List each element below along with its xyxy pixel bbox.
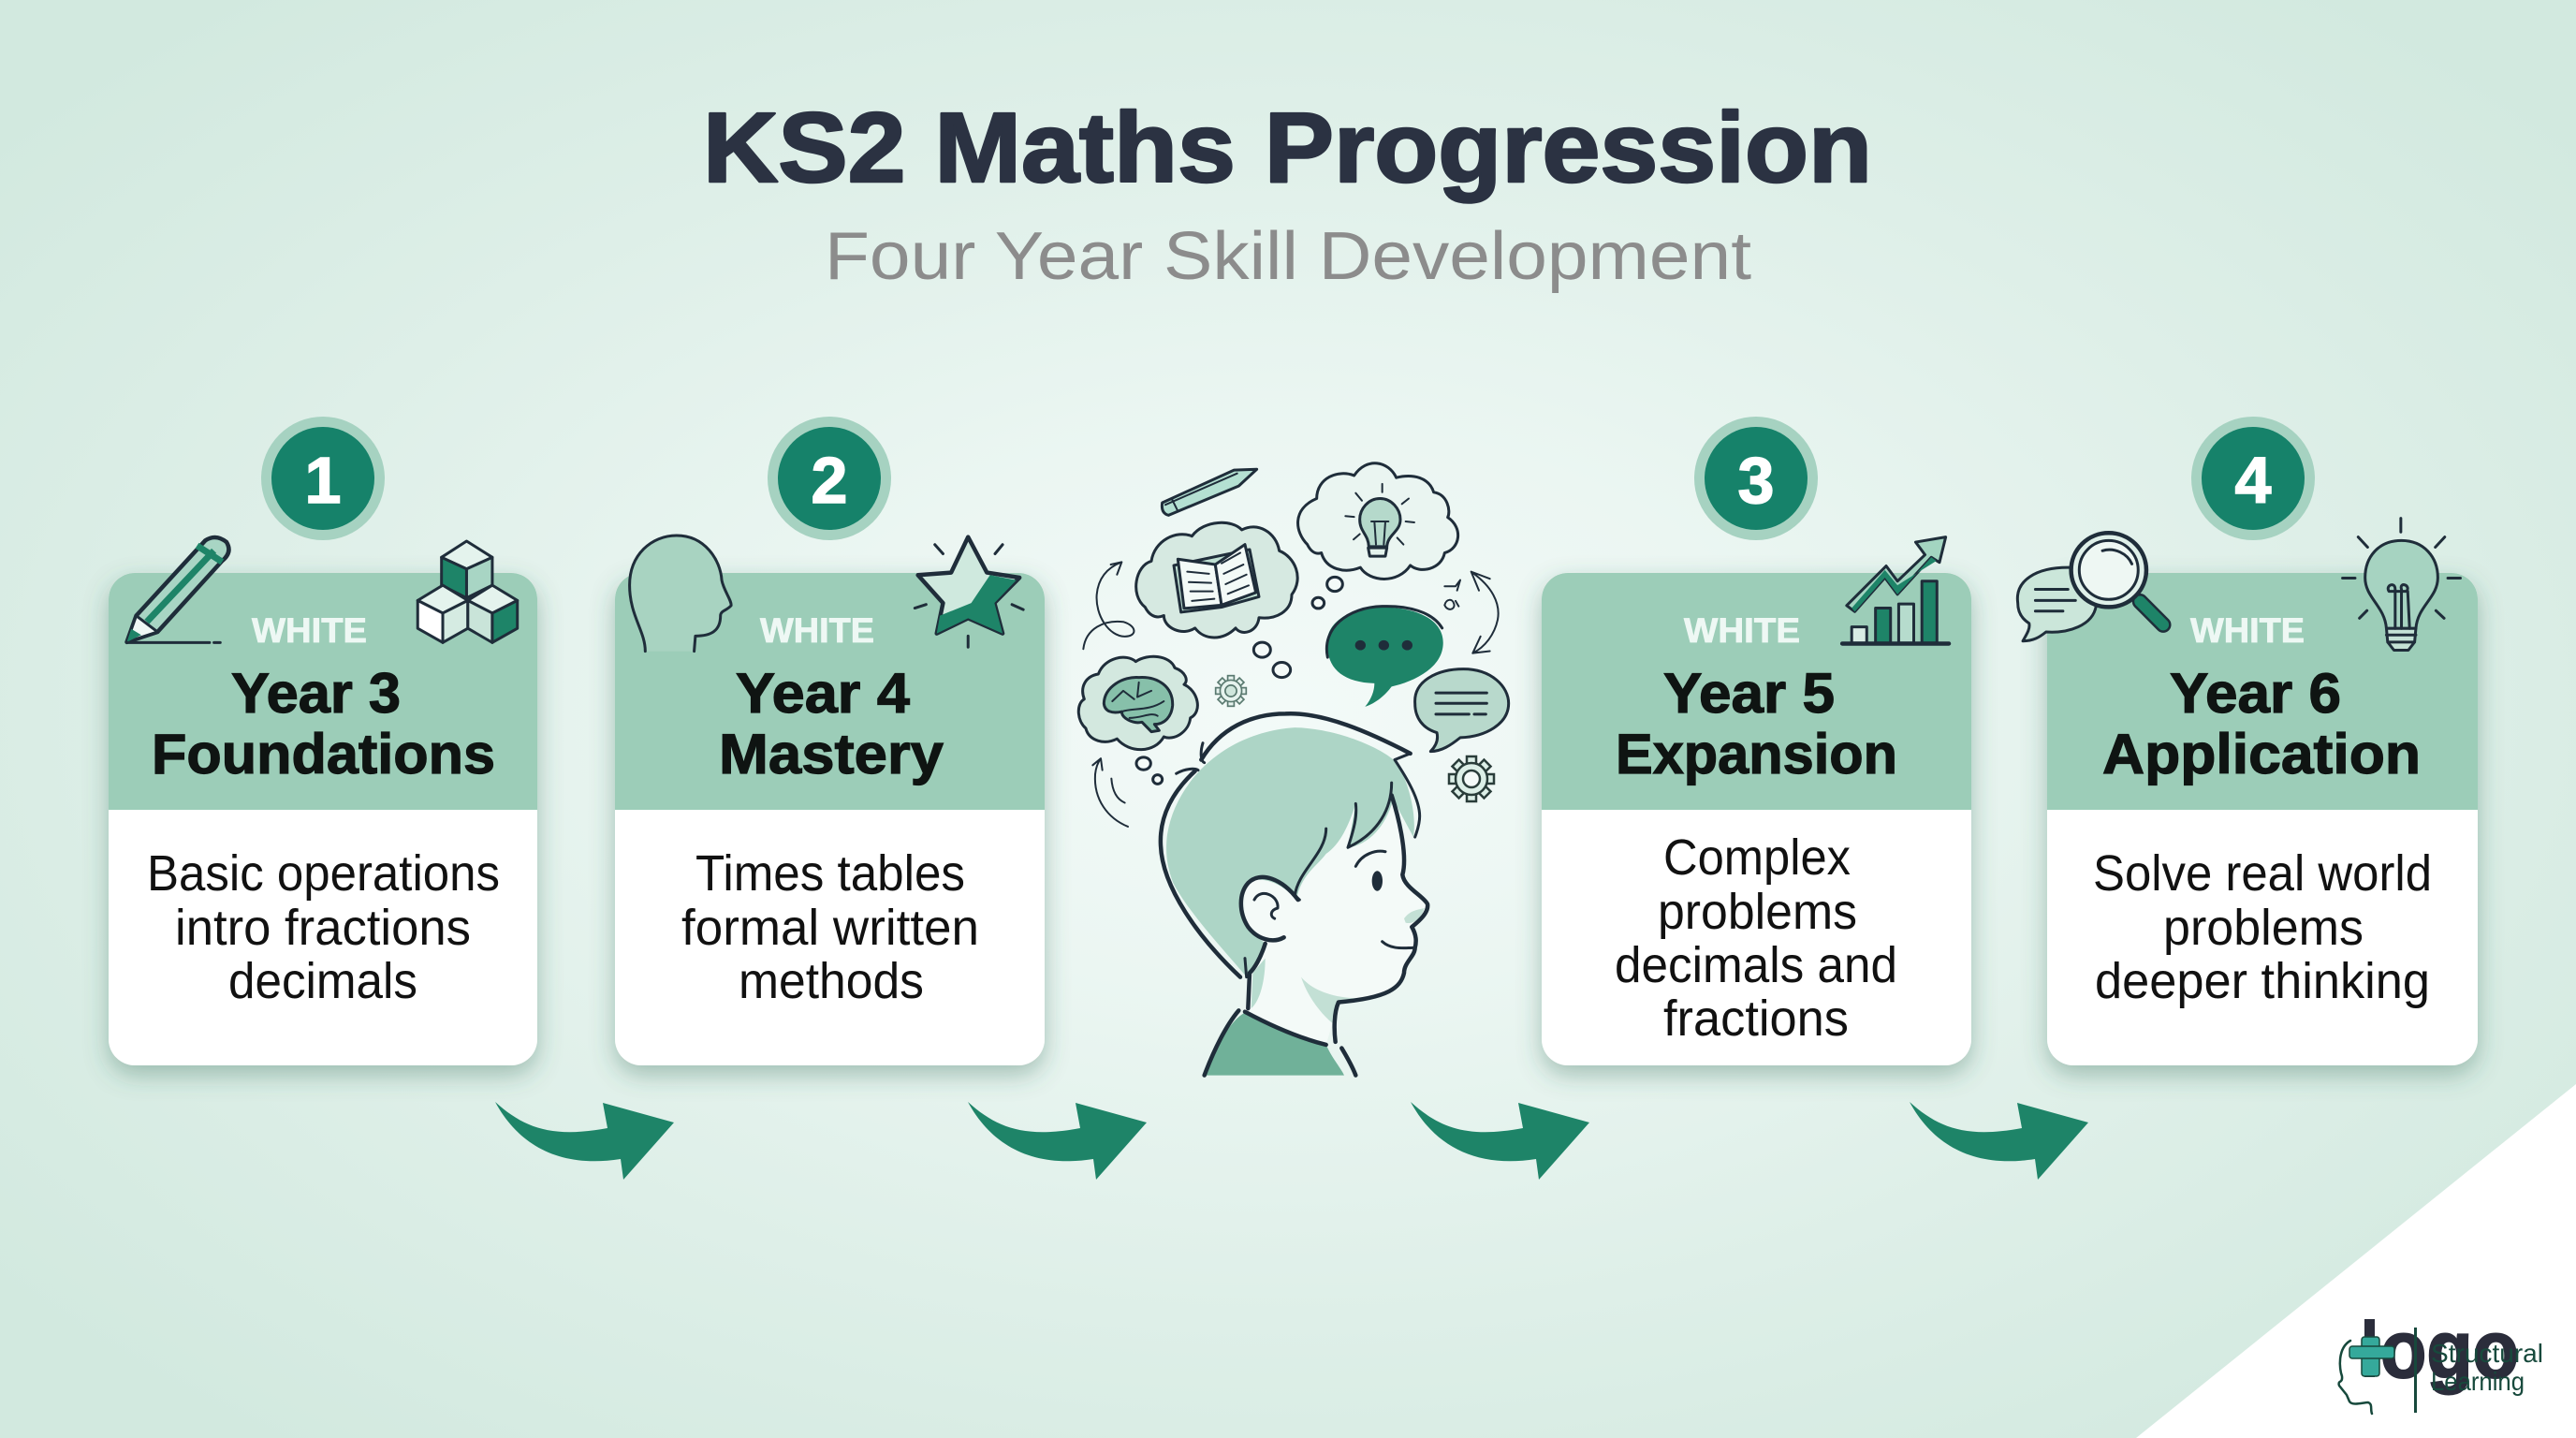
panel: year 4: WHITE [760, 611, 874, 650]
icon: large gear [1449, 756, 1494, 801]
panel: year 3: decimals [228, 953, 417, 1009]
panel: year 5 [1542, 573, 1971, 1065]
thought: pencil [1162, 469, 1257, 515]
icon: growth chart [1842, 537, 1949, 643]
number badge 4: 4 [2235, 444, 2272, 517]
arrow: centre to year 5 [1411, 1102, 1589, 1180]
panel: year 5: Expansion [1616, 723, 1897, 785]
arrow: year 4 to centre [968, 1102, 1147, 1180]
title: KS2 Maths Progression [703, 93, 1872, 203]
thought: light speech bubble [1415, 669, 1509, 752]
panel: year 3 [109, 573, 537, 1065]
child head and hair [1161, 713, 1427, 1076]
panel: year 5: fractions [1663, 990, 1849, 1047]
panel: year 6: Application [2102, 723, 2421, 785]
panel: year 6: WHITE [2190, 611, 2305, 650]
number badge 3: 3 [1738, 444, 1774, 517]
number badge 3 [1694, 417, 1818, 540]
icon: small gear [1216, 676, 1246, 706]
icon: star [915, 537, 1023, 647]
logo: ogo [2380, 1305, 2519, 1395]
number badge 4 [2191, 417, 2315, 540]
arrow: year 5 to year 6 [1910, 1102, 2088, 1180]
panel: year 6: problems [2163, 900, 2364, 956]
arrow: year 3 to year 4 [495, 1102, 674, 1180]
number badge 1: 1 [305, 444, 341, 517]
number badge 1 [261, 417, 385, 540]
thought: light bulb [1298, 463, 1458, 579]
panel: year 5: Year 5 [1663, 662, 1835, 725]
thought: dark speech bubble [1326, 607, 1443, 707]
panel: year 4: formal written [681, 900, 979, 956]
panel: year 5: problems [1658, 884, 1857, 940]
panel: year 3: Foundations [152, 723, 495, 785]
panel: year 6: Solve real world [2093, 845, 2432, 902]
panel: year 4: Times tables [695, 845, 965, 902]
logo [2339, 1305, 2543, 1414]
thought: book [1136, 522, 1297, 638]
icon: light bulb [2343, 519, 2460, 650]
panel: year 6 [2047, 573, 2478, 1065]
panel: year 6: Year 6 [2170, 662, 2341, 725]
icon: cubes [417, 541, 518, 642]
panel: year 3: Year 3 [231, 662, 401, 725]
panel: year 5: Complex [1663, 829, 1851, 886]
thought dots and motion arrows [1083, 562, 1499, 827]
panel: year 4 [615, 573, 1045, 1065]
panel: year 3: Basic operations [147, 845, 500, 902]
thought: brain [1078, 656, 1197, 750]
panel: year 5: decimals and [1615, 937, 1897, 993]
icon: chat and magnifier [2017, 533, 2163, 641]
number badge 2 [768, 417, 891, 540]
panel: year 3: intro fractions [175, 900, 471, 956]
white corner triangle [2136, 1084, 2576, 1438]
panel: year 3: WHITE [252, 611, 367, 650]
illustration: child with thoughts [1078, 463, 1509, 1076]
logo: Learning [2431, 1367, 2525, 1396]
panel: year 4: methods [739, 953, 924, 1009]
panel: year 6: deeper thinking [2095, 953, 2430, 1009]
panel: year 5: WHITE [1684, 611, 1800, 650]
logo: Structural [2431, 1339, 2543, 1368]
icon: pencil [126, 537, 228, 642]
icon: head silhouette [630, 536, 731, 652]
number badge 2: 2 [812, 444, 847, 517]
subtitle: Four Year Skill Development [825, 219, 1751, 294]
panel: year 4: Mastery [719, 723, 944, 785]
panel: year 4: Year 4 [736, 662, 911, 725]
